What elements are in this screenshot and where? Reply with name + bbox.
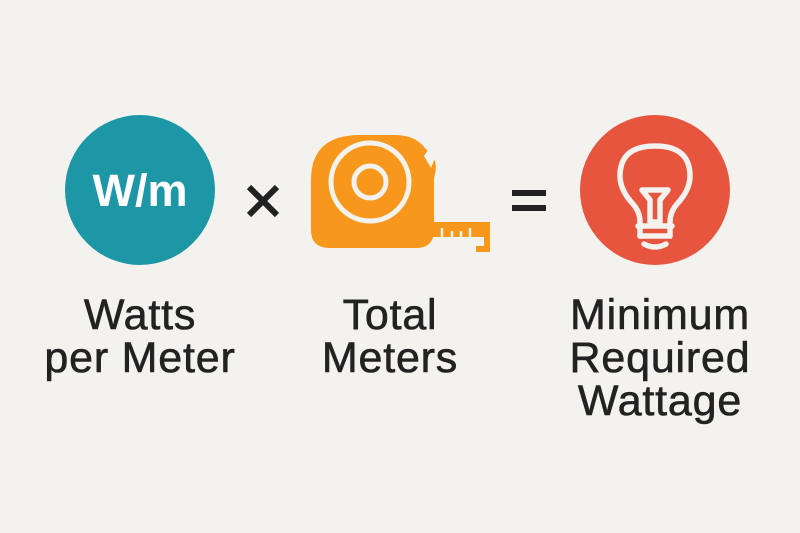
label: total meters [322,291,458,382]
label: total meters: Total [343,291,437,339]
label: minimum required wattage: Required [570,334,750,382]
icon: W/m circle: W/m [92,165,188,216]
icon: multiply sign [246,184,280,218]
label: minimum required wattage [570,291,750,425]
label: watts per meter [44,291,236,382]
label: total meters: Meters [322,334,458,382]
label: minimum required wattage: Wattage [578,377,742,425]
icon: equals sign [512,190,546,211]
label: minimum required wattage: Minimum [570,291,750,339]
label: watts per meter: per Meter [44,334,236,382]
label: watts per meter: Watts [84,291,196,339]
